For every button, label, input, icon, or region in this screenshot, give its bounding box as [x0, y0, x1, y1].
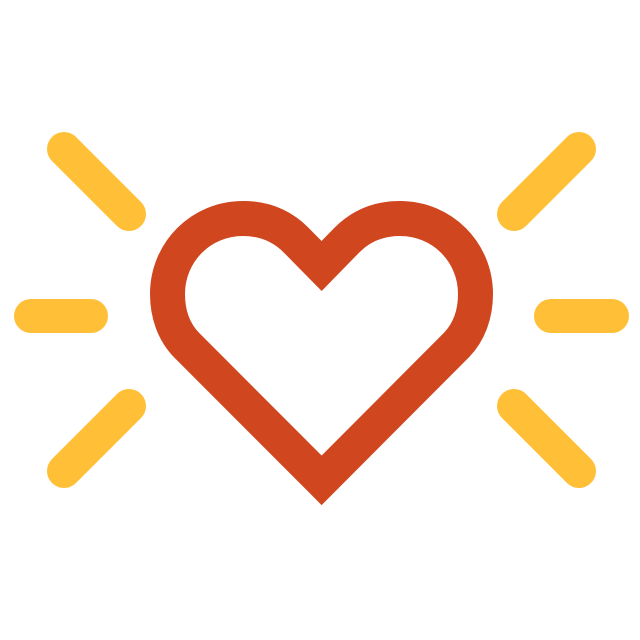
- ray: middle right: [551, 299, 612, 333]
- ray: middle left: [31, 299, 91, 333]
- ray: bottom left: [64, 406, 129, 471]
- rays: yellow light beams: [31, 149, 612, 471]
- ray: top right: [514, 149, 579, 214]
- icon: heart outline: [168, 218, 476, 480]
- ray: top left: [64, 149, 129, 214]
- ray: bottom right: [514, 406, 579, 471]
